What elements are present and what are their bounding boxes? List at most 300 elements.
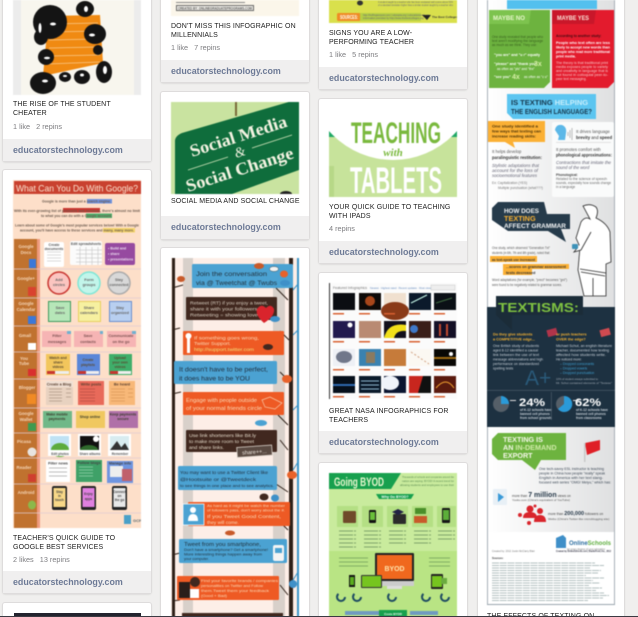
Picasa pictures [48, 434, 131, 457]
tip 8: If you Tweet Good Content, [207, 514, 281, 520]
textisms: over the edge [556, 328, 612, 385]
phones, laptop and tablet [349, 574, 447, 589]
reading skills column: One study identified a [492, 124, 539, 128]
title: Google services: TEACHER'S QUICK GUIDE TO [13, 535, 115, 542]
stats: low-performing teacher: 1 like 5 repins [329, 50, 378, 59]
Docs row: documents [45, 247, 63, 251]
service name column: Reader [17, 465, 32, 470]
grammar study text: Word adaptations (for example, "prect" becomes "grd") [492, 278, 567, 282]
Calendar cards: calendars [80, 311, 98, 315]
tip 10 [177, 576, 297, 600]
heading: is texting helping: THE ENGLISH LANGUAGE? [511, 107, 592, 116]
title: low-performing teacher: SIGNS YOU ARE A LOW- [329, 30, 412, 37]
tip 6: Use link shorteners like Bit.ly [189, 433, 257, 438]
tip 5: Engage with people outside [186, 398, 257, 404]
stat: 62 percent: 62% [575, 397, 601, 409]
maybe no panel: One study revealed that people who [492, 35, 543, 39]
maybe no panel: "please" and "thank you" [494, 62, 538, 66]
textisms: over the edge: Michael Schut, an english literature [556, 344, 612, 348]
tip 8 [183, 502, 290, 526]
Gmail cards: on the go [112, 340, 130, 344]
stat: 200,000 followers: more than 200,000 followers on [548, 511, 603, 517]
Wallet cards: Keep payments [110, 412, 136, 416]
intro text: With its ever-growing list of products and services, there's almost no limit [14, 209, 141, 213]
Android phones: on [118, 494, 121, 498]
panel: Google services pin [3, 170, 151, 593]
Google+ circles: Stay [115, 278, 124, 282]
Wallet cards: payments [49, 417, 65, 421]
language brevity column: It promotes comfort with [556, 147, 601, 152]
BYOD monitor: BYOD [384, 566, 404, 573]
heading: how does texting affect grammar: HOW DOES [504, 208, 539, 215]
maybe yes panel: MAYBE YES [557, 16, 589, 22]
YouTube cards: Watch and [49, 356, 67, 360]
reading skills column: It helps develop [492, 149, 522, 154]
credits and sources: Created by: 2012 Justin McClarty Blair [492, 550, 535, 553]
grammar study text: tests decreased [506, 270, 536, 275]
ESL instructor text [539, 467, 611, 484]
captions and stars [333, 313, 445, 398]
row 3 thumbnails [333, 349, 456, 366]
GCF logo [124, 515, 142, 524]
stat: 62 percent [551, 392, 608, 420]
textisms: over the edge: affected how students write. [556, 353, 606, 357]
textisms: competitive edge: Do they give students [493, 332, 532, 336]
stat: 24 percent: 24% [519, 397, 545, 409]
source: teaching with tablets [319, 241, 467, 263]
title: student cheater: CHEATER [13, 110, 47, 117]
tip 8: of followers pass, don't worry about the #. [207, 508, 285, 512]
tip 9: your computer. [184, 557, 209, 561]
intro text: account, you'll have access to these services and many, many more. [20, 228, 134, 232]
Reader cards: Follow blogs [77, 461, 101, 465]
Calendar cards: Stay [116, 306, 125, 310]
title: millennials [171, 23, 296, 39]
Android phones [52, 486, 127, 510]
section: textisms: TEXTISMS: [498, 300, 579, 315]
illustration: Teaching with Tablets cover [328, 117, 458, 198]
Blogger cards: Write posts [81, 382, 101, 386]
maybe yes panel: people who read more traditional [556, 50, 610, 54]
stat: 62 percent: banned cell phones [576, 412, 606, 416]
reason text [339, 531, 455, 547]
tip 6: and share links. [189, 445, 224, 450]
maybe yes panel: likely to accept new words than [556, 46, 610, 50]
maybe no panel: as often as "c u" [524, 75, 549, 79]
why go BYOD banner [376, 494, 414, 499]
heading: how does texting affect grammar: TEXTING [504, 214, 536, 223]
intro text: Google is more than just a search engine. [42, 200, 111, 204]
image: millennials footer: CREATED BY: ONLINEGRADUATEPROGRAMS.COM [178, 6, 252, 10]
tip 4: it does have to be YOU [179, 376, 250, 382]
tip 3 [183, 331, 284, 355]
tip 5: of your normal friends circle [186, 406, 262, 412]
title: teaching with tablets [329, 204, 450, 220]
image: low-performing teacher footer: information provided by http://www.thebestcolleges.org [363, 17, 424, 20]
source: millennials: educatorstechnology.com [171, 66, 281, 76]
reading skills column: Ex: Capitalization (YES) [492, 181, 527, 185]
intro text: to what you can do with a Google account. [41, 214, 112, 218]
YouTube cards: videos [114, 365, 126, 369]
title: student cheater [13, 101, 111, 117]
stats: Google services: 2 likes 13 repins [13, 555, 70, 564]
stat: 7 million views: more than 7 million views on [512, 492, 571, 499]
tip 7 [178, 466, 297, 490]
Android phones: Connect [113, 490, 127, 494]
language brevity column: Related to the science of speech [556, 177, 607, 181]
maybe yes panel: media exposes people to variety [556, 65, 608, 69]
YouTube cards: playlists [81, 363, 95, 367]
illustration: Teaching with Tablets cover: with [383, 147, 403, 159]
service name column: Blogger [19, 385, 36, 390]
textisms: over the edge: teacher, documented how texting [556, 348, 609, 352]
window edge [0, 616, 638, 617]
Docs row [44, 241, 135, 267]
maybe no panel: 4x [512, 74, 520, 81]
stat: 62 percent: from classrooms [576, 416, 602, 420]
language brevity column: It drives language [576, 129, 611, 134]
Google+ circles [48, 272, 130, 294]
header [329, 473, 454, 489]
textisms: competitive edge: One British study of students [493, 344, 539, 348]
tip 3: If something goes wrong, [194, 336, 259, 340]
Blogger cards: Be heard [114, 382, 131, 386]
title: NASA infographics: TEACHERS [329, 417, 368, 424]
reading skills column: few ways that texting can [492, 128, 542, 134]
heading: how does texting affect grammar: AFFECT GRAMMAR [504, 224, 567, 230]
stat: 7 million views [493, 489, 571, 505]
stats: millennials: 1 like 7 repins [171, 43, 220, 52]
textisms: competitive edge: A+ [525, 367, 551, 390]
tip 10: personalities on Twitter and Follow [201, 583, 263, 588]
service name column: Android [18, 490, 35, 495]
tip 6: to make more room to Tweet [189, 439, 255, 444]
device band [329, 551, 457, 617]
textisms: over the edge: OVER the edge? [556, 338, 586, 342]
bottom border [487, 604, 615, 605]
reason tiles [337, 506, 456, 527]
heading: is texting helping [507, 94, 596, 119]
title: teaching with tablets: YOUR QUICK GUIDE TO TEACHING [329, 204, 450, 211]
tip 7: to see things in one place and to see analytics. [180, 483, 274, 488]
Google+ circles: Add [55, 278, 63, 282]
title: NASA infographics: GREAT NASA INFOGRAPHICS FOR [329, 408, 449, 415]
maybe yes panel: peer text messaging. [556, 77, 587, 81]
title: low-performing teacher: PERFORMING TEACHER [329, 39, 414, 46]
Wallet cards: Make mobile [46, 412, 68, 416]
maybe no panel: 3x [534, 61, 542, 68]
source: Google services: educatorstechnology.com [13, 577, 123, 587]
Gmail cards [42, 331, 136, 347]
source: millennials [161, 60, 309, 82]
language brevity column: Phonological: [556, 173, 578, 177]
panel: student cheater pin [3, 0, 151, 161]
title: Google services [13, 535, 115, 551]
maybe no panel: as much as we think. They use: [492, 43, 537, 47]
grammar study text [490, 246, 569, 287]
illustration: book surrounded by black ink creatures [13, 0, 141, 95]
statistics bars: Costs BYOD [384, 612, 403, 616]
Google+ circles: connected [110, 283, 129, 287]
tip 2 [186, 297, 280, 323]
image: low-performing teacher footer: http://huffingtonpost.com | edutopia.org | educationworld.org [363, 14, 430, 17]
service name column [14, 239, 141, 528]
credits and sources: Sources: [492, 556, 504, 560]
header: nation are saying: BYOD! A recent trend for [402, 479, 454, 483]
image: bottom-left pin [14, 613, 141, 617]
maybe no panel: MAYBE NO [493, 16, 525, 22]
Gmail cards: Filter [52, 334, 62, 338]
tip 11 [182, 613, 283, 617]
Gmail cards: Save [84, 334, 92, 338]
Picasa pictures: Remember [112, 452, 129, 456]
Android phones: Stay [56, 490, 63, 494]
Reader cards: Manage info [109, 462, 132, 466]
stat: 24 percent [487, 390, 615, 420]
reading skills column: account for the loss of [492, 168, 539, 173]
row 1 thumbnails [333, 293, 456, 320]
YouTube cards [46, 354, 132, 375]
maybe yes panel: print media. [556, 54, 576, 58]
Google+ circles: Form [84, 278, 94, 282]
panel: social media pin [161, 92, 309, 239]
source: teaching with tablets: educatorstechnology.com [329, 247, 439, 257]
tip 2: Retweeting = showing love [190, 312, 259, 318]
reading skills column: Multiple punctuation (what???) [498, 186, 543, 190]
Picasa pictures: Edit photos [51, 452, 69, 456]
maybe yes panel: According to another study: [556, 34, 601, 38]
illustration: Social Media and Social Change sign [170, 101, 300, 195]
Gmail cards: Communicate [108, 334, 134, 338]
Google+ circles: groups [83, 283, 95, 287]
panel: low-performing teacher pin [319, 0, 467, 89]
Calendar cards: Save [56, 306, 64, 310]
source: low-performing teacher: educatorstechnology.com [329, 73, 439, 83]
service name column: Google [18, 301, 34, 306]
reading skills column: paralinguistic restitution: [492, 155, 542, 160]
language brevity column [552, 122, 614, 197]
tip 10: Find your favorite brands / companies [201, 578, 278, 583]
tip 1 [192, 263, 293, 288]
maybe yes panel: not found in colloquial peer-to- [556, 73, 608, 77]
China flag [584, 440, 600, 462]
Docs row: • share [108, 252, 120, 256]
YouTube cards: share [53, 360, 63, 364]
panel: teaching with tablets pin [319, 99, 467, 263]
tip 3: Twitter Support. [194, 341, 231, 346]
infographic: Twitter tips on birch trees [170, 257, 300, 616]
tip 9: More interesting things happen away from [184, 552, 262, 556]
Calendar cards: Share [84, 306, 94, 310]
tip 6 [186, 430, 277, 457]
ESL instructor text: One tech-savvy ESL instructor is teaching [539, 467, 604, 471]
Calendar cards: organized [111, 311, 130, 315]
tip 2: share it with your followers. [190, 306, 259, 312]
grammar study text: ...scores on grammar assessment [506, 264, 567, 269]
illustration: Social Media and Social Change sign: & [233, 144, 248, 162]
source: NASA infographics: educatorstechnology.com [329, 437, 439, 447]
heading: in-demand export: AN IN-DEMAND [503, 443, 557, 452]
statistics bars [345, 610, 438, 617]
Android phones: Enjoy [84, 492, 93, 496]
textisms: competitive edge: a COMPETITIVE edge... [493, 338, 535, 342]
textisms: over the edge: He noticed more: [556, 358, 582, 362]
YouTube cards: your own [112, 360, 128, 364]
tip 9 [179, 539, 287, 563]
Calendar cards: dates [55, 311, 65, 315]
service name column: Google [18, 244, 34, 249]
Gmail cards: messages [48, 340, 66, 344]
grammar study text: were found to be negatively related to grammar scores. [492, 283, 562, 287]
textisms: over the edge: or push teachers [556, 332, 587, 336]
stats: student cheater: 1 like 2 repins [13, 122, 62, 131]
image: low-performing teacher footer: SOURCES: [340, 15, 358, 21]
title: student cheater: THE RISE OF THE STUDENT [13, 101, 111, 108]
Picasa pictures: Share albums [80, 452, 101, 456]
textisms: over the edge: – Dropped vowels [560, 366, 587, 370]
YouTube cards: Create [83, 358, 93, 362]
BYOD monitor [375, 553, 414, 589]
textisms: competitive edge: aged 8-12 identified a causal [493, 348, 538, 352]
maybe yes panel [552, 10, 614, 88]
panel: millennials pin [161, 0, 309, 82]
service name column: You [20, 356, 28, 361]
maybe yes panel: People who text often are less [556, 41, 610, 45]
section: textisms [487, 296, 615, 427]
reading skills column: increase reading skills: [492, 134, 536, 138]
maybe no panel: as often as "pls" and "thx" [497, 67, 536, 71]
row 4 thumbnails [333, 376, 456, 393]
source: low-performing teacher [319, 67, 467, 89]
tip 7: @Hootsuite or @Tweetdeck [180, 477, 257, 482]
Reader cards [46, 460, 133, 483]
YouTube cards: videos [52, 365, 64, 369]
textisms: over the edge: – Dropped punctuation [560, 371, 594, 375]
language brevity column: in a language [556, 185, 575, 189]
stat: 24 percent: banned cell phones [520, 412, 550, 416]
stat: 200,000 followers: Weibo (China's Twitter-like microblogging site) [548, 517, 609, 521]
Blogger cards: Create a Blog [47, 382, 72, 386]
title: Google services: GOOGLE BEST SERVICES [13, 544, 103, 551]
title: millennials: MILLENNIALS [171, 32, 218, 39]
tip 4 [174, 361, 292, 384]
heading: is texting helping: IS TEXTING HELPING [511, 98, 588, 107]
image: NASA featured infographics grid [328, 282, 457, 400]
Docs row: Create [49, 243, 59, 247]
bird [255, 420, 267, 426]
maybe no panel: text aren't modifying the language [492, 39, 543, 43]
source: social media [161, 216, 309, 239]
Android phones: apps [85, 497, 92, 501]
intro text: Learn about some of Google's most popular services below! With a Google [15, 224, 139, 228]
Google+ circles: circles [53, 283, 65, 287]
bird [225, 530, 235, 536]
Wallet cards: secure [117, 417, 129, 421]
Docs row: • presentations [108, 258, 133, 262]
heading: in-demand export: EXPORT [503, 451, 533, 460]
textisms: competitive edge: message abbreviations and high [493, 358, 543, 362]
service name column: Tube [19, 361, 30, 366]
title: NASA infographics [329, 408, 449, 424]
panel: NASA infographics pin [319, 273, 467, 453]
maybe yes panel: and creativity in language that is [556, 69, 608, 73]
textisms: competitive edge: link between the use of text [493, 353, 539, 357]
source: student cheater: educatorstechnology.com [13, 145, 123, 155]
ESL instructor text: people in China how people "really" speak [539, 472, 605, 476]
credits and sources: OnlineSchools [569, 541, 612, 547]
reading skills column: socioemotional features [492, 173, 538, 178]
tip 8: As hard as it might be watch the number [207, 504, 286, 508]
maybe yes panel: The theory is that traditional print [556, 61, 608, 65]
why go BYOD banner: Why Go BYOD? [381, 495, 409, 499]
service name column: Google [18, 411, 34, 416]
service name column: Docs [21, 250, 32, 255]
ESL instructor text: focused web series "OMG! Meiyu," which has: [539, 480, 611, 484]
grammar study text: students (in 6th, 7th and 8th grade), noted that: [492, 251, 550, 255]
title: social media: SOCIAL MEDIA AND SOCIAL CHANGE [171, 198, 300, 205]
ESL instructor text: English in America with her text slang- [539, 476, 604, 480]
Wallet cards: Shop online [80, 415, 100, 419]
person texting outline [574, 205, 611, 296]
stat: 62 percent: of K-12 schools have [576, 408, 608, 412]
infographic: What can you do with Google [12, 180, 142, 529]
language brevity column: Contractions that imitate the [556, 160, 612, 165]
reading skills column: Stylistic adaptations that [492, 163, 540, 168]
Reader cards: Filter news [48, 462, 68, 466]
stat: 200,000 followers [518, 504, 609, 525]
service name column: Google+ [17, 276, 35, 281]
textisms: over the edge: Mr. Schut contained elements of "Textese" [556, 381, 612, 385]
source: Google services [3, 571, 151, 593]
Docs row: Edit spreadsheets [71, 242, 101, 246]
textisms: competitive edge [493, 328, 558, 390]
title: low-performing teacher [329, 30, 414, 46]
header: allowing students and employees to use their [400, 483, 454, 487]
heading: in-demand export [492, 433, 566, 470]
service name column: Calendar [17, 307, 36, 312]
service name column: Gmail [19, 333, 31, 338]
source: student cheater [3, 139, 151, 161]
tip 5 [183, 392, 284, 415]
Blogger cards [46, 381, 135, 405]
tip 9: Tweet from you smartphone, [184, 542, 262, 548]
tip 2: Retweet (RT) if you enjoy a tweet, [190, 300, 268, 306]
textisms: competitive edge: performance on standardized [493, 362, 539, 366]
textisms: over the edge: 10% of student essays submitted to [556, 377, 598, 381]
grammar study text: as text-speak use increased [492, 257, 536, 262]
tip 10: (Good + Bad) [201, 593, 228, 598]
tip 7: You may want to use a Twitter Client like [180, 470, 269, 475]
credits and sources [488, 532, 614, 604]
panel: bottom-left pin [3, 603, 151, 617]
tip 10: them.Tweet them your feedback [201, 588, 269, 593]
tip 3: http://support.twitter.com [194, 347, 254, 352]
stats: teaching with tablets: 4 repins [329, 224, 355, 233]
Calendar cards [48, 302, 132, 322]
tip 1: Join the conversation [196, 271, 267, 278]
maybe no panel: "see you" [494, 75, 511, 79]
device rings [337, 593, 449, 601]
image: NASA featured infographics grid: Newest · Highest rated · Recent updates · Most viewed [370, 286, 434, 290]
service name column: Wallet [20, 417, 33, 422]
tree trunks [172, 258, 299, 617]
Docs row: • Build and [108, 246, 126, 250]
Gmail cards: contacts [80, 340, 96, 344]
panel: Twitter tips pin [161, 248, 309, 617]
reading skills column [488, 121, 545, 190]
image: NASA featured infographics grid: Featured Infographics [333, 286, 367, 290]
infographic: Going BYOD [328, 472, 458, 616]
